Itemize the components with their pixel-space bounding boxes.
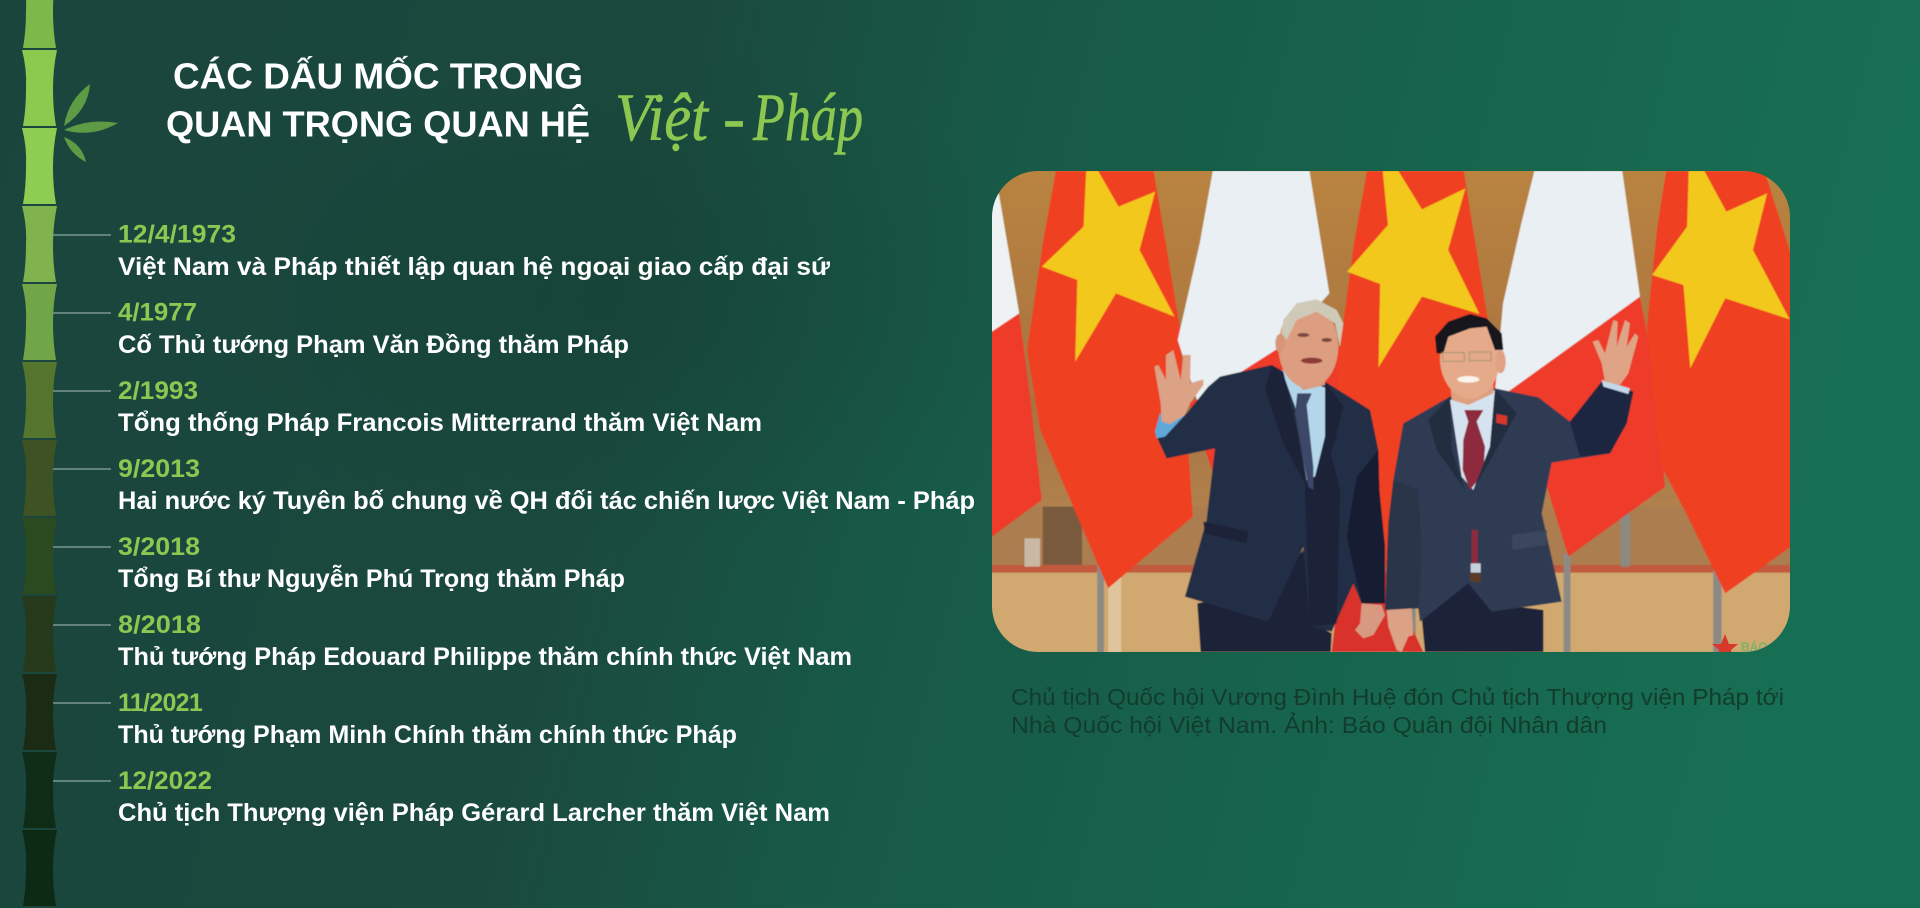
left man (1154, 299, 1385, 652)
photo caption (1011, 684, 1784, 738)
Vietnamese flag 2 (1336, 171, 1508, 567)
photo caption: Nhà Quốc hội Việt Nam. Ảnh: Báo Quân đội Nhân dân (1011, 710, 1607, 738)
timeline item 8 (53, 767, 830, 827)
photo caption: Chủ tịch Quốc hội Vương Đình Huệ đón Chủ tịch Thượng viện Pháp tới (1011, 684, 1784, 710)
timeline item 8: Chủ tịch Thượng viện Pháp Gérard Larcher thăm Việt Nam (118, 799, 830, 827)
title: - (723, 79, 745, 155)
title: Pháp (752, 79, 863, 155)
right man (1385, 314, 1638, 652)
timeline item 5 (53, 533, 625, 593)
timeline item 4 (53, 455, 975, 515)
timeline item 4: 9/2013 (118, 455, 200, 483)
French flag 2 (1178, 171, 1346, 493)
timeline item 8: 12/2022 (118, 767, 212, 795)
timeline item 2 (53, 299, 629, 359)
title: CÁC DẤU MỐC TRONG (173, 54, 583, 96)
left French flag (992, 192, 1042, 537)
timeline item 3: 2/1993 (118, 377, 198, 405)
timeline item 6 (53, 611, 852, 671)
photo: two leaders waving in front of Vietnamese and French flags (980, 160, 1817, 660)
Vietnamese flag 3 (1647, 171, 1796, 593)
timeline item 6: 8/2018 (118, 611, 201, 639)
Vietnamese flag 1 (1027, 171, 1193, 588)
title: QUAN TRỌNG QUAN HỆ (166, 102, 590, 144)
timeline item 3 (53, 377, 762, 437)
timeline item 5: Tổng Bí thư Nguyễn Phú Trọng thăm Pháp (118, 563, 625, 593)
photo backdrop (980, 160, 1817, 653)
flag poles (1097, 553, 1722, 653)
timeline item 6: Thủ tướng Pháp Edouard Philippe thăm chính thức Việt Nam (118, 643, 852, 671)
photo credit watermark (1712, 634, 1767, 652)
title (166, 54, 863, 155)
timeline item 3: Tổng thống Pháp Francois Mitterrand thăm Việt Nam (118, 409, 762, 437)
timeline item 7 (53, 689, 737, 749)
timeline item 7: 11/2021 (118, 689, 203, 717)
timeline item 4: Hai nước ký Tuyên bố chung về QH đối tác chiến lược Việt Nam - Pháp (118, 487, 975, 515)
timeline item 2: Cố Thủ tướng Phạm Văn Đồng thăm Pháp (118, 331, 629, 359)
timeline item 5: 3/2018 (118, 533, 200, 561)
timeline item 1: 12/4/1973 (118, 221, 236, 249)
photo credit watermark: BÁO QUÂN (1741, 639, 1806, 654)
timeline item 2: 4/1977 (118, 299, 197, 327)
red carpet (1332, 567, 1423, 652)
timeline item 1 (53, 221, 831, 281)
title: Việt (615, 79, 710, 155)
French flag 3 (1495, 171, 1665, 557)
bamboo stalk (22, 0, 57, 906)
icon: bamboo leaves (64, 84, 118, 162)
timeline item 1: Việt Nam và Pháp thiết lập quan hệ ngoại giao cấp đại sứ (118, 253, 831, 281)
timeline item 7: Thủ tướng Phạm Minh Chính thăm chính thức Pháp (118, 721, 737, 749)
